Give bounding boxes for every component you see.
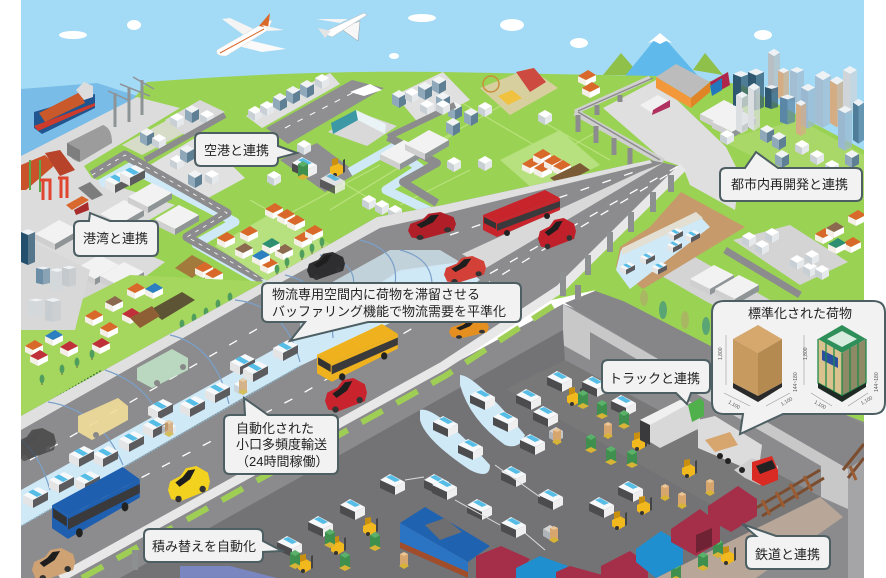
callout: automated small-lot transport: （24時間稼働） <box>236 454 328 469</box>
right housing and warehouses <box>436 70 866 318</box>
callout: port link: 港湾と連携 <box>83 231 148 246</box>
autonomous carts in warehouse <box>277 371 643 557</box>
airplane left <box>217 13 286 56</box>
dimension labels <box>718 335 880 411</box>
pale delivery vehicles in tunnel <box>78 349 188 440</box>
callout: automated small-lot transport <box>224 398 338 474</box>
callout: automated transshipment <box>144 529 282 562</box>
callout: airport link: 空港と連携 <box>204 143 269 158</box>
callout: standardized cargo <box>712 301 885 434</box>
callout: truck link: トラックと連携 <box>609 371 700 386</box>
callout: buffering function: バッファリング機能で物流需要を平準化 <box>272 304 506 319</box>
warehouses along the port road <box>35 130 449 292</box>
airport runway <box>266 80 384 144</box>
callout: buffering function: 物流専用空間内に荷物を滞留させる <box>272 287 480 302</box>
harbour cranes <box>108 77 154 127</box>
field grid lines <box>250 90 610 245</box>
cardboard pallet load <box>733 325 782 402</box>
dimension labels: 144~180 <box>793 372 799 392</box>
railway track <box>656 444 864 578</box>
blue train <box>400 507 490 578</box>
callout: buffering function <box>262 283 521 341</box>
white truck with green cab <box>640 398 704 448</box>
theme park <box>480 68 558 115</box>
dimension labels: 1,100 <box>780 396 794 408</box>
callout: automated transshipment: 積み替えを自動化 <box>152 539 256 554</box>
callout: standardized cargo: 標準化された荷物 <box>748 306 852 321</box>
callout: urban redevelopment link: 都市内再開発と連携 <box>731 177 848 192</box>
dimension labels: 1,100 <box>727 400 741 411</box>
sky <box>21 0 864 240</box>
green and orange ground details <box>590 289 740 340</box>
elevated ramp to logistics yard <box>575 78 663 165</box>
dimension labels: 1,100 <box>813 400 827 411</box>
buses <box>52 190 560 539</box>
callout: rail link: 鉄道と連携 <box>755 547 820 562</box>
dimension labels: 1,800 <box>803 347 809 360</box>
container yard with red cranes <box>21 150 103 215</box>
left housing and fields <box>21 275 270 420</box>
grey storage shed <box>67 125 112 162</box>
roll cages and parcels <box>289 390 724 578</box>
callout: port link <box>74 213 158 256</box>
forklifts <box>298 387 736 573</box>
port area <box>21 97 180 310</box>
lane markings <box>30 165 680 520</box>
autonomous carts in buffer lane <box>23 340 298 508</box>
highway piers <box>135 175 671 570</box>
dimension labels: 1,800 <box>718 347 724 360</box>
green roll cage load <box>818 325 866 402</box>
callout: urban redevelopment link <box>720 152 862 201</box>
ground <box>21 72 864 440</box>
sea <box>21 83 150 158</box>
callout: truck link <box>602 360 710 404</box>
local roads with transparent lanes <box>92 105 455 288</box>
skyscraper district <box>720 49 864 200</box>
logistics yard <box>603 80 740 210</box>
cars on upper road <box>14 212 576 578</box>
container ship <box>34 82 95 134</box>
callout: automated small-lot transport: 自動化された <box>236 421 314 436</box>
orange logistics centre <box>640 64 756 138</box>
edge margins <box>0 0 21 578</box>
buffering lane dome <box>21 240 480 526</box>
left city block <box>21 229 90 330</box>
callout: airport link <box>195 133 297 166</box>
factory buildings <box>122 100 245 198</box>
airport terminal <box>267 110 397 194</box>
red truck <box>698 416 778 486</box>
callout: automated small-lot transport: 小口多頻度輸送 <box>236 437 327 452</box>
housing clusters centre <box>175 203 332 284</box>
dimension labels: 144~180 <box>874 372 880 392</box>
lower structure walls and floor <box>21 289 864 578</box>
freight containers <box>476 486 757 578</box>
airplane right <box>316 13 367 41</box>
callout: rail link <box>742 524 830 569</box>
terminal district buildings <box>246 72 492 136</box>
dimension labels: 1,100 <box>860 395 874 407</box>
elevated highway deck <box>21 160 683 578</box>
mount fuji and hills <box>603 33 723 76</box>
underground tunnel cutaway <box>616 192 745 289</box>
tunnel bays in warehouse <box>420 375 525 474</box>
clouds <box>59 14 772 59</box>
